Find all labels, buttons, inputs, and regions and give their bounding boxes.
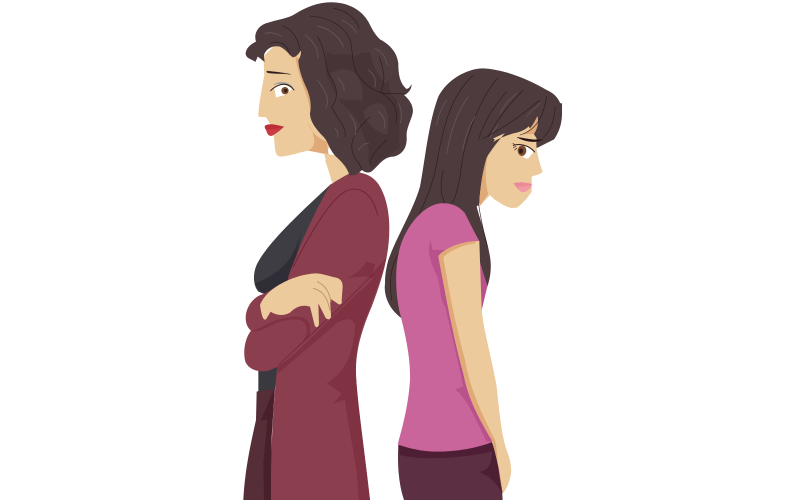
- face: [479, 123, 543, 208]
- sleeve crease: [251, 317, 310, 347]
- long hair lines: [390, 75, 523, 300]
- lips: [265, 124, 284, 136]
- upper-arm fold: [338, 262, 375, 283]
- top shadow: [255, 230, 302, 294]
- eyebrow: [517, 137, 543, 142]
- iris: [281, 87, 289, 94]
- skirt: [243, 387, 275, 500]
- eyelid line: [271, 84, 294, 91]
- neck shadow: [308, 123, 330, 163]
- hair dark lines: [270, 8, 406, 170]
- iris: [518, 145, 526, 156]
- forearm dark edge: [278, 274, 373, 365]
- arm shadow: [438, 241, 503, 493]
- mother head: [246, 2, 413, 182]
- figure: daughter: [385, 68, 562, 500]
- hair beside face: [473, 137, 495, 206]
- hair highlights: [265, 20, 402, 150]
- waist shadow: [398, 442, 497, 460]
- neck: [479, 137, 533, 208]
- hair: [246, 2, 413, 176]
- hair shadow strands: [326, 50, 400, 168]
- mother body and clothing: [243, 160, 389, 500]
- folded forearm sleeve: [244, 277, 373, 371]
- upper lid: [513, 145, 535, 152]
- fringe highlight: [527, 103, 540, 117]
- eye shadow: [273, 82, 293, 87]
- jaw shadow: [479, 142, 493, 207]
- long hair highlights: [437, 93, 517, 153]
- finger creases: [313, 282, 331, 310]
- lashes: [513, 143, 517, 150]
- dark top: [254, 183, 332, 295]
- figure: mother: [243, 2, 413, 500]
- daughter lower body: [396, 203, 511, 500]
- hand: [260, 273, 343, 327]
- fringe lines: [483, 97, 555, 138]
- trousers: [398, 442, 503, 500]
- temple shadow: [295, 55, 312, 110]
- pocket fold: [478, 453, 503, 493]
- daughter back hair: [385, 68, 562, 318]
- eye white: [517, 146, 534, 159]
- arm: [438, 241, 511, 493]
- top below arm: [258, 360, 280, 392]
- fringe: [480, 100, 562, 170]
- coat shadow under arm: [273, 257, 387, 403]
- skirt shadow: [261, 387, 275, 500]
- long hair: [385, 68, 562, 318]
- forehead gap: [523, 116, 538, 134]
- long coat: [271, 172, 389, 500]
- t-shirt: [396, 203, 493, 452]
- shirt shadow under arm: [429, 241, 493, 442]
- face: [258, 45, 330, 157]
- eyebrow: [267, 71, 291, 74]
- coat back shadow: [345, 377, 370, 500]
- neck: [325, 160, 357, 185]
- eye white: [274, 85, 292, 97]
- neck under hair: [324, 153, 350, 182]
- daughter head: [473, 97, 562, 208]
- lips: [513, 182, 532, 192]
- shoulder crease: [293, 189, 378, 267]
